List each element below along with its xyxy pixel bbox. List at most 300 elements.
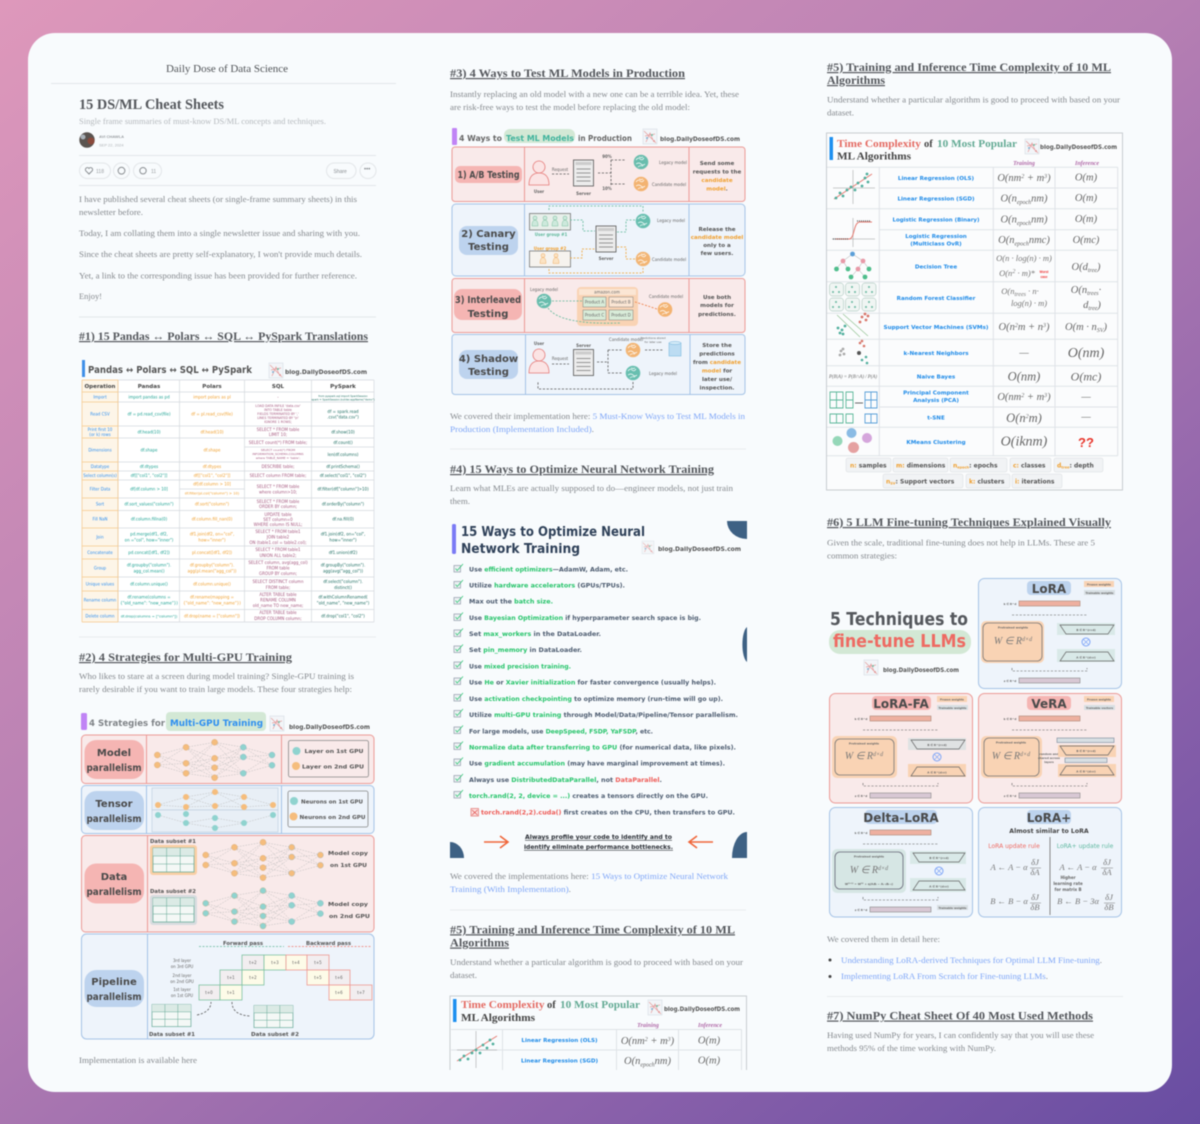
cheat sheet: pandas polars sql pyspark table: SELECT column FROM table;: [250, 473, 306, 478]
cheat sheet: pandas polars sql pyspark table: spark = SparkSession.builder.appName("demo"): [311, 398, 375, 402]
checklist: Always use DistributedDataParallel , not DataParallel.: [469, 777, 662, 784]
training and inference complexities: nm): [1031, 214, 1048, 226]
cheat sheet: pandas polars sql pyspark table: SELECT DISTINCT column: [253, 579, 304, 584]
training and inference complexities: Worst: [1040, 270, 1049, 274]
intro text: [79, 195, 362, 301]
cheat sheet: pandas polars sql pyspark table: df = pd.read_csv(file): [127, 412, 171, 416]
checklist: For large models, use DeepSpeed, FSDP, YaFSDP, etc.: [469, 728, 653, 736]
column 2: [450, 66, 747, 1070]
algorithm names: Naive Bayes: [917, 374, 956, 380]
cheat sheet: pandas polars sql pyspark table: UNION ALL table2;: [260, 553, 296, 558]
training and inference complexities: O(d: [1072, 262, 1088, 273]
cheat sheet: pandas polars sql pyspark table: Concatenate: [87, 550, 113, 555]
cheat sheet: pandas polars sql pyspark table: df.select("col1", "col2"): [320, 473, 367, 478]
cheat sheet: pandas polars sql pyspark table: JOIN table2: [266, 534, 290, 540]
training and inference complexities: + m: [1024, 392, 1045, 403]
training and inference complexities: O(n: [998, 322, 1015, 333]
cheat sheet: pandas polars sql pyspark table: df.printSchema(): [326, 464, 360, 469]
training and inference complexities: —: [1018, 348, 1029, 359]
training and inference complexities: ): [1045, 322, 1050, 333]
paragraph complexity column 2: Understand whether a particular algorithm is good to proceed with based on your: [450, 958, 743, 967]
panel: pipeline parallelism: 2nd layer: [173, 973, 192, 978]
cheat sheet: pandas polars sql pyspark table: df.column.fillna(0): [131, 516, 168, 522]
panel: LoRA+: A ← A − α: [989, 862, 1028, 872]
cheat sheet: pandas polars sql pyspark table: df.shape: [140, 448, 158, 452]
cheat sheet: pandas polars sql pyspark table: UPDATE table: [264, 512, 292, 517]
heading #1: #1) 15 Pandas ↔ Polars ↔ SQL ↔ PySpark Translations: [79, 329, 368, 343]
panel: LoRA+: B ← B − α: [990, 896, 1028, 906]
heading #5 in column 2: Algorithms: [450, 936, 509, 950]
cheat sheet: time complexity table: [826, 133, 1122, 490]
heading #6: #6) 5 LLM Fine-tuning Techniques Explained Visually: [827, 515, 1111, 529]
training and inference complexities: ·: [1099, 285, 1102, 296]
link list: Implementing LoRA From Scratch for Fine-tuning LLMs .: [841, 972, 1048, 981]
panel: LoRA+: δA: [1030, 867, 1040, 877]
panel: interleaved testing: Candidate model: [649, 294, 683, 299]
training and inference complexities: ??: [1078, 435, 1094, 450]
paragraph testing: [450, 90, 739, 112]
panel: interleaved testing: predictions.: [698, 312, 736, 318]
training and inference complexities: 2: [1026, 414, 1029, 420]
training and inference complexities: O(m): [1075, 214, 1098, 225]
checklist: Normalize data after transferring to GPU (for numerical data, like pixels).: [469, 744, 736, 752]
notation legend: n: [953, 462, 970, 470]
intro text: Enjoy!: [79, 292, 102, 301]
action buttons: 11: [151, 169, 156, 175]
panel: Delta-LoRA: z ∈ R^d: [855, 908, 867, 912]
panel: LoRA-FA: A ∈ R^(d×r): [927, 770, 947, 774]
cheat sheet: multi gpu strategies: 4 Strategies for: [89, 719, 166, 729]
notation legend: Support vectors: [900, 478, 954, 486]
algorithm names: t-SNE: [927, 416, 945, 422]
notation legend: tree: [1061, 466, 1070, 470]
panel: pipeline parallelism: Backward pass: [306, 941, 351, 947]
panel: Delta-LoRA: Delta-LoRA: [863, 811, 939, 825]
cheat sheet: pandas polars sql pyspark table: df.count(): [333, 440, 353, 445]
cheat sheet: pandas polars sql pyspark table: Dimensions: [88, 448, 112, 452]
panel: LoRA: [978, 578, 1122, 688]
cheat sheet: pandas polars sql pyspark table: INTO TABLE table: [264, 408, 292, 412]
panel: A/B testing: model.: [706, 186, 728, 192]
cheat sheet: pandas polars sql pyspark table: DROP COLUMN column;: [254, 616, 302, 621]
table title: Pandas ↔ Polars ↔ SQL ↔ PySpark: [88, 365, 253, 376]
panel: data parallelism: on 2nd GPU: [329, 914, 370, 920]
algorithm names: KMeans Clustering: [906, 440, 966, 446]
cheat sheet: pandas polars sql pyspark table: pd.merge(df1, df2,: [130, 532, 168, 536]
cheat sheet: pandas polars sql pyspark table: agg_col.mean(): [133, 568, 165, 574]
panel: pipeline parallelism: t+4: [292, 960, 300, 965]
cheat sheet: pandas polars sql pyspark table: LINES TERMINATED BY '\n': [257, 416, 299, 420]
panel: data parallelism: Data subset #1: [150, 839, 196, 845]
training and inference complexities: log(n) · m): [1011, 298, 1047, 308]
training and inference complexities: ): [1046, 392, 1051, 403]
training and inference complexities: + m: [1024, 173, 1045, 184]
paragraph numpy: methods 95% of the time working with NumPy.: [827, 1044, 996, 1053]
cheat sheet: pandas polars sql pyspark table: SELECT count(*) FROM table;: [249, 440, 307, 445]
cheat sheet: pandas polars sql pyspark table: df.groupby("column").: [127, 562, 171, 568]
sheet title: Network Training: [461, 541, 580, 557]
cropped complexity table: Linear Regression (OLS): [521, 1038, 598, 1044]
notation legend: k: clusters: [969, 478, 1005, 486]
column 3: [826, 60, 1123, 1053]
panel: LoRA-FA: LoRA-FA: [873, 697, 929, 711]
cheat sheet: multi gpu strategies: blog.DailyDoseofDS.com: [289, 723, 370, 731]
cheat sheet: pandas polars sql pyspark table: agg(avg("agg_col")): [323, 568, 363, 574]
algorithm names: Linear Regression (OLS): [898, 176, 975, 182]
panel: data parallelism: Model copy: [328, 902, 369, 908]
panel: LoRA+: [978, 808, 1122, 917]
panel: LoRA+: Higher: [1060, 875, 1076, 880]
training and inference complexities: O(m): [1075, 172, 1098, 184]
paragraph multi gpu: Who likes to stare at a screen during model training? Single-GPU training is: [79, 672, 354, 681]
training and inference complexities: · m)*: [1015, 268, 1036, 278]
training and inference complexities: ): [1096, 300, 1101, 311]
checklist: torch.rand(2, 2, device = ...) creates a tensors directly on the GPU.: [469, 793, 708, 800]
heading #7: #7) NumPy Cheat Sheet Of 40 Most Used Methods: [827, 1008, 1093, 1022]
panel: VeRA: VeRA: [1031, 697, 1067, 711]
paragraph complexity: Understand whether a particular algorithm is good to proceed with based on your: [827, 96, 1120, 105]
checklist: Set max_workers in the DataLoader.: [469, 631, 601, 638]
panel: A/B testing: User: [534, 189, 544, 194]
panel: canary testing: Release the: [698, 227, 736, 233]
cheat sheet: pandas polars sql pyspark table: INFORMATION_SCHEMA.COLUMNS: [252, 452, 304, 456]
cheat sheet: pandas polars sql pyspark table: Import: [93, 394, 107, 400]
panel: VeRA: A ∈ R^(d×r): [1076, 770, 1096, 774]
panel: Delta-LoRA: W⁽ᵗ⁺¹⁾ = W⁽ᵗ⁾ + η(AᵢBᵢ − Aᵢ₋₁Bᵢ₋₁): [845, 882, 894, 886]
author byline: AVI CHAWLA: [99, 134, 124, 139]
training and inference complexities: ): [1102, 322, 1107, 333]
cheat sheet: pandas polars sql pyspark table: ORDER BY column;: [259, 504, 297, 509]
cheat sheet: pandas polars sql pyspark table: SELECT * FROM table: [257, 427, 300, 432]
cheat sheet: pandas polars sql pyspark table: Rename column: [84, 598, 117, 602]
cheat sheet: pandas polars sql pyspark table: Group: [94, 566, 107, 570]
link paragraph testing: Production (Implementation Included) .: [450, 425, 594, 434]
panel: LoRA+: δJ: [1031, 892, 1040, 902]
link paragraph optimize: We covered the implementations here: 15 Ways to Optimize Neural Network: [450, 872, 729, 881]
panel: A/B testing: [452, 147, 745, 202]
panel: pipeline parallelism: t+1: [227, 975, 235, 980]
cheat sheet: pandas polars sql pyspark table: df = spark.read: [327, 409, 359, 414]
cropped complexity table: 2: [645, 1037, 648, 1043]
panel: shadow testing: from candidate: [693, 360, 741, 366]
cropped complexity table: epoch: [640, 1062, 655, 1068]
panel: model parallelism: parallelism: [86, 763, 142, 774]
cheat sheet: pandas polars sql pyspark table: df.sort("column"): [195, 502, 230, 506]
checklist: [454, 564, 738, 816]
algorithm names: Linear Regression (SGD): [897, 196, 975, 202]
panel: pipeline parallelism: t+0: [205, 990, 213, 995]
panel: VeRA: W ∈ R: [992, 751, 1020, 762]
panel: LoRA: W ∈ R: [994, 636, 1022, 647]
panel: pipeline parallelism: t+2: [249, 975, 257, 980]
panel: LoRA-FA: [830, 694, 972, 803]
cheat sheet: pandas polars sql pyspark table: FROM table;: [266, 585, 290, 590]
cheat sheet: pandas polars sql pyspark table: df.head(10): [200, 430, 224, 434]
training and inference complexities: O(n: [1001, 286, 1015, 296]
training and inference complexities: epoch: [1015, 242, 1029, 248]
cheat sheet: pandas polars sql pyspark table: RENAME COLUMN: [260, 598, 296, 602]
sheet title: 15 Ways to Optimize Neural: [461, 524, 645, 540]
panel: LoRA-FA: z ∈ R^d: [855, 794, 867, 798]
cheat sheet: pandas polars sql pyspark table: Print first 10: [88, 427, 113, 432]
cheat sheet: pandas polars sql pyspark table: [82, 360, 375, 622]
sheet title: fine-tune LLMs: [833, 631, 966, 652]
panel: Delta-LoRA: [830, 808, 972, 917]
cheat sheet: pandas polars sql pyspark table: df.orderBy("column"): [322, 502, 365, 506]
panel: VeRA: Trainable vectors: [1086, 706, 1113, 710]
panel: LoRA+: δJ: [1105, 892, 1114, 902]
panel: A/B testing: 90%: [602, 154, 612, 159]
cheat sheet: pandas polars sql pyspark table: from pyspark.sql import SparkSession: [318, 394, 368, 398]
cropped complexity table: ML Algorithms: [461, 1013, 535, 1024]
link list: [828, 956, 1102, 981]
algorithm names: Support Vector Machines (SVMs): [884, 325, 989, 331]
cropped complexity table: + m: [648, 1036, 668, 1047]
panel: VeRA: z ∈ R^d: [1004, 794, 1016, 798]
intro text: I have published several cheat sheets (or single-frame summary sheets) in this: [79, 195, 357, 204]
action buttons: [80, 163, 376, 178]
sheet title: [829, 609, 971, 675]
panel: VeRA: shared across: [1038, 756, 1060, 760]
panel: interleaved testing: 3) Interleaved: [455, 295, 521, 306]
cheat sheet: 4 ways to test ml models: in Production: [578, 134, 632, 143]
cheat sheet: time complexity table: Inference: [1074, 161, 1099, 167]
cheat sheet: pandas polars sql pyspark table: df.shape: [204, 448, 221, 452]
panel: shadow testing: Testing: [468, 367, 509, 378]
panel: VeRA: layers: [1044, 760, 1054, 764]
checklist: Use He or Xavier initialization for faster convergence (usually helps).: [469, 680, 716, 686]
cheat sheet: pandas polars sql pyspark table: len(df.columns): [328, 452, 359, 457]
panel: LoRA: B ∈ R^(r×d): [1076, 628, 1096, 632]
cheat sheet: pandas polars sql pyspark table: df.groupby("column").: [190, 562, 234, 568]
cheat sheet: pandas polars sql pyspark table: df.column.unique(): [130, 582, 168, 586]
panel: shadow testing: Server: [576, 343, 591, 348]
training and inference complexities: O(m · n: [1065, 322, 1097, 333]
training and inference complexities: 2: [1021, 393, 1024, 399]
post title: 15 DS/ML Cheat Sheets: [79, 97, 224, 113]
cheat sheet: pandas polars sql pyspark table: agg(pl.mean("agg_col")): [187, 568, 237, 574]
panel: model parallelism: [82, 735, 374, 784]
cheat sheet: pandas polars sql pyspark table: df.column.unique(): [193, 582, 231, 586]
implementation note: Implementation is available here: [79, 1056, 197, 1065]
cheat sheet: pandas polars sql pyspark table: Unique values: [86, 582, 114, 586]
panel: pipeline parallelism: t+1: [227, 990, 235, 995]
panel: shadow testing: Store the: [702, 343, 732, 349]
cheat sheet: pandas polars sql pyspark table: FIELDS TERMINATED BY ',': [257, 412, 299, 416]
panel: tensor parallelism: parallelism: [86, 814, 142, 825]
panel: LoRA+: δB: [1104, 902, 1114, 912]
cheat sheet: 4 ways to test ml models: Test ML Models: [506, 134, 574, 143]
cheat sheet: pandas polars sql pyspark table: Delete column: [85, 614, 115, 618]
cheat sheet: pandas polars sql pyspark table: import polars as pl: [193, 394, 231, 400]
panel: pipeline parallelism: on 3rd GPU: [171, 964, 193, 969]
panel: LoRA: z ∈ R^d: [1004, 679, 1016, 683]
training and inference complexities: —: [1080, 392, 1091, 403]
training and inference complexities: O(n: [999, 268, 1012, 278]
paragraph multi gpu: rarely desirable if you want to train large models. These four strategies help:: [79, 685, 352, 694]
panel: tensor parallelism: [82, 786, 374, 834]
cropped complexity table: O(m): [698, 1036, 721, 1046]
action buttons: Share: [334, 169, 347, 175]
panel: LoRA+: A ← A − α: [1058, 862, 1097, 872]
cropped complexity table: of: [547, 1000, 556, 1011]
panel: A/B testing: Send some: [700, 161, 734, 167]
panel: LoRA+: δB: [1030, 902, 1040, 912]
training and inference complexities: 3: [1043, 393, 1047, 399]
panel: tensor parallelism: Tensor: [95, 799, 133, 810]
training and inference complexities: O(nm: [997, 173, 1021, 184]
panel: LoRA+: LoRA+: [1027, 811, 1071, 825]
training and inference complexities: O(n: [1000, 194, 1017, 204]
paragraph optimize: [450, 484, 734, 506]
checklist: Use mixed precision training.: [469, 664, 571, 670]
panel: shadow testing: model for: [702, 368, 732, 374]
panel: shadow testing: Predictions stored: [640, 336, 666, 340]
cheat sheet: time complexity table: blog.DailyDoseofDS.com: [1040, 143, 1117, 151]
panel: Delta-LoRA: B ∈ R^(r×d): [929, 856, 949, 860]
panel: shadow testing: for later use: [644, 340, 662, 344]
cropped complexity table: Time Complexity: [461, 1000, 545, 1011]
panel: model parallelism: Model: [97, 748, 131, 759]
panel: Delta-LoRA: Pretrained weights: [854, 854, 884, 858]
panel: canary testing: only to a: [703, 243, 731, 249]
link paragraph optimize: Training (With Implementation) .: [450, 885, 571, 894]
panel: LoRA-FA: d×d: [873, 752, 884, 758]
notation legend: depth: [1074, 462, 1094, 470]
link paragraph optimize: [450, 872, 729, 894]
notation legend: :: [1069, 462, 1072, 470]
panel: pipeline parallelism: on 2nd GPU: [170, 979, 194, 984]
callout profile your code: Always profile your code to identify and to: [525, 835, 672, 841]
panel: interleaved testing: Legacy model: [530, 287, 558, 292]
heading #5: [827, 60, 1111, 87]
algorithm names: [884, 176, 989, 446]
table title: of: [924, 139, 933, 150]
cheat sheet: pandas polars sql pyspark table: Polars: [202, 384, 222, 390]
cheat sheet: pandas polars sql pyspark table: df[["col1", "col2"]]: [131, 473, 168, 478]
heading #2: #2) 4 Strategies for Multi-GPU Training: [79, 650, 292, 664]
cheat sheet: pandas polars sql pyspark table: Datatype: [91, 464, 110, 469]
cheat sheet: pandas polars sql pyspark table: df.drop("col1", "col2"): [321, 614, 365, 618]
panel: pipeline parallelism: 1st layer: [173, 987, 191, 992]
panel: pipeline parallelism: Data subset #2: [251, 1032, 299, 1038]
cheat sheet: pandas polars sql pyspark table: GROUP BY column;: [259, 571, 297, 576]
panel: Delta-LoRA: W ∈ R: [850, 865, 878, 876]
row icons: P(B|A) = P(B∩A) / P(A): [828, 373, 877, 380]
panel: interleaved testing: Use both: [703, 295, 731, 301]
checklist: Use gradient accumulation (may have marginal improvement at times).: [469, 760, 725, 768]
notation legend: :: [969, 462, 972, 470]
training and inference complexities: 2: [1012, 269, 1015, 275]
column 1: newsletter header and first cheat sheets: [51, 64, 396, 1065]
checklist: Set pin_memory in DataLoader.: [469, 647, 582, 654]
intro text: newsletter before.: [79, 208, 143, 217]
checklist: Utilize multi-GPU training through Model/Data/Pipeline/Tensor parallelism.: [469, 712, 738, 719]
cheat sheet: 4 ways to test ml models: [452, 128, 745, 394]
cheat sheet: pandas polars sql pyspark table: df.select("column").: [323, 579, 363, 584]
cheat sheet: pandas polars sql pyspark table: Fill NaN: [92, 516, 108, 522]
cheat sheet: pandas polars sql pyspark table: how="inner"): [198, 538, 226, 542]
intro text: Today, I am collating them into a single newsletter issue and sharing with you.: [79, 229, 360, 238]
panel: shadow testing: User: [534, 341, 544, 346]
panel: VeRA: random and: [1040, 752, 1058, 756]
training and inference complexities: trees: [1015, 292, 1027, 298]
table title: [837, 139, 1017, 162]
algorithm names: Principal Component: [903, 390, 969, 396]
author byline: [79, 132, 124, 148]
training and inference complexities: O(n · log(n) · m): [996, 253, 1052, 263]
cheat sheet: pandas polars sql pyspark table: -: [277, 394, 279, 400]
panel: canary testing: Legacy model: [657, 218, 685, 223]
panel: pipeline parallelism: t+5: [314, 960, 322, 965]
sheet title: blog.DailyDoseofDS.com: [883, 666, 959, 674]
training and inference complexities: epoch: [1017, 200, 1031, 206]
panel: shadow testing: Legacy model: [649, 371, 677, 376]
cheat sheet: pandas polars sql pyspark table: .csv("data.csv"): [327, 414, 359, 420]
publication name: Daily Dose of Data Science: [166, 64, 288, 75]
intro text: Since the cheat sheets are pretty self-explanatory, I won't provide much details.: [79, 250, 362, 259]
cheat sheet: pandas polars sql pyspark table: df1.union(df2): [329, 550, 358, 555]
training and inference complexities: nm): [1031, 194, 1048, 204]
panel: A/B testing: candidate: [701, 178, 733, 184]
cheat sheet: pandas polars sql pyspark table: FROM table: [266, 566, 290, 570]
panel: data parallelism: Data: [101, 872, 127, 883]
algorithm names: Logistic Regression: [905, 234, 967, 240]
cheat sheet: 4 ways to test ml models: blog.DailyDoseofDS.com: [660, 135, 740, 143]
panel: canary testing: [452, 204, 745, 276]
cropped complexity table: 10 Most Popular: [560, 1000, 640, 1011]
panel: data parallelism: on 1st GPU: [330, 863, 367, 869]
cheat sheet: pandas polars sql pyspark table: df.sort_values("column"): [124, 502, 174, 506]
panel: Delta-LoRA: d×d: [878, 866, 889, 872]
cheat sheet: pandas polars sql pyspark table: pd.concat([df1, df2]): [128, 550, 170, 555]
panel: pipeline parallelism: [82, 934, 374, 1039]
checklist: torch.rand(2,2).cuda() first creates on the CPU, then transfers to GPU.: [481, 810, 735, 816]
panel: VeRA: k ∈ R^d: [1004, 717, 1016, 721]
cheat sheet: pandas polars sql pyspark table: Operation: [85, 384, 116, 390]
cheat sheet: pandas polars sql pyspark table: df.drop(columns = ["column"]): [121, 614, 178, 618]
panel: Delta-LoRA: Trainable weights: [939, 906, 967, 910]
panel: LoRA+: for matrix B: [1054, 887, 1082, 892]
cheat sheet: pandas polars sql pyspark table: df.dtypes: [203, 464, 221, 469]
training and inference complexities: SV: [1097, 328, 1105, 334]
panel: A/B testing: Request: [552, 167, 569, 172]
panel: A/B testing: 1) A/B Testing: [458, 170, 520, 181]
panel: interleaved testing: Product D: [611, 312, 631, 318]
notation legend: d: [1057, 462, 1070, 470]
panel: pipeline parallelism: t+7: [357, 990, 365, 995]
panel: canary testing: User group #2: [534, 246, 566, 251]
table title: 10 Most Popular: [937, 139, 1017, 150]
panel: pipeline parallelism: on 1st GPU: [171, 993, 193, 998]
cheat sheet: pandas polars sql pyspark table: SELECT * FROM table1: [255, 529, 301, 534]
panel: data parallelism: [82, 836, 374, 932]
link paragraph testing: [450, 412, 746, 434]
notation legend: n: samples: [850, 462, 887, 470]
arrow left: [689, 836, 713, 848]
panel: interleaved testing: [452, 278, 745, 332]
cheat sheet: pandas polars sql pyspark table: df.head(10): [137, 430, 161, 434]
panel: LoRA: A ∈ R^(d×r): [1076, 656, 1096, 660]
checklist: Utilize hardware accelerators (GPUs/TPUs).: [469, 582, 625, 590]
training and inference complexities: m + n: [1018, 322, 1043, 333]
training and inference complexities: [996, 172, 1107, 450]
notation legend: epochs: [974, 462, 998, 470]
cheat sheet: multi gpu strategies: Multi-GPU Training: [170, 719, 263, 729]
training and inference complexities: epoch: [1017, 221, 1031, 227]
panel: shadow testing: predictions: [699, 352, 735, 358]
cheat sheet: pandas polars sql pyspark table: SELECT * FROM table1: [255, 547, 301, 552]
